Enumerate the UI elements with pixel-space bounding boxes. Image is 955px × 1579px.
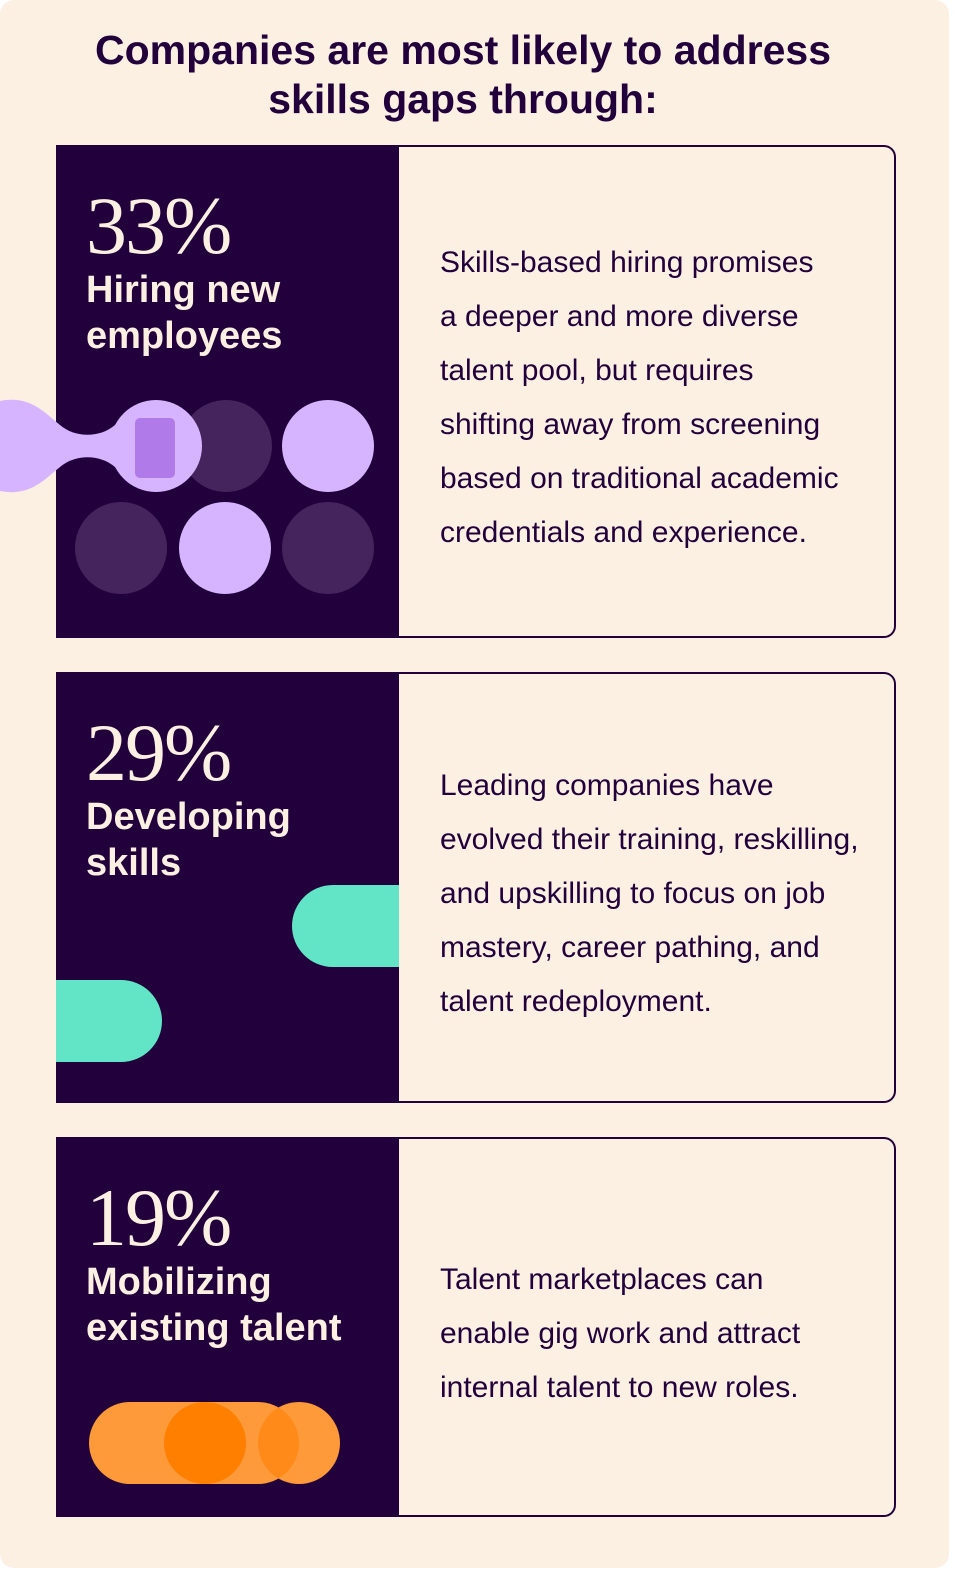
text box: talent redeployment. [440,985,712,1018]
label: employees [86,315,282,357]
text box: Talent marketplaces can [440,1263,764,1296]
percentage: 33% [86,180,230,271]
label: skills [86,842,181,884]
panel: hiring [0,145,896,638]
text box: talent pool, but requires [440,354,754,387]
label: Hiring new [86,269,280,311]
panel: developing [56,672,896,1103]
text box: enable gig work and attract [440,1317,800,1350]
text box: a deeper and more diverse [440,300,799,333]
text box [398,145,896,638]
text box: internal talent to new roles. [440,1371,799,1404]
percentage: 19% [86,1172,230,1263]
label: existing talent [86,1307,342,1349]
dark panel: 33% [56,145,399,638]
text box: credentials and experience. [440,516,807,549]
text box: Leading companies have [440,769,774,802]
label: Mobilizing [86,1261,272,1303]
dark panel: 29% [56,672,399,1103]
percentage: 29% [86,707,230,798]
dark panel: 19% [56,1137,399,1517]
label: Developing [86,796,291,838]
text box: and upskilling to focus on job [440,877,825,910]
text box [398,1137,896,1517]
icon: teal pill left [56,980,162,1062]
label [86,1261,342,1349]
text box: based on traditional academic [440,462,839,495]
icon: teal pill right [292,885,412,967]
icon: orange pills [89,1402,340,1484]
title: Companies are most likely to address [95,27,831,73]
text box: shifting away from screening [440,408,820,441]
title: skills gaps through: [268,76,658,122]
label [86,796,291,884]
text box: mastery, career pathing, and [440,931,820,964]
panel: mobilizing [56,1137,896,1517]
label [86,269,282,357]
text box: Skills-based hiring promises [440,246,813,279]
title [95,27,831,122]
text box: evolved their training, reskilling, [440,823,859,856]
icon: circles [0,400,374,594]
text box [398,672,896,1103]
